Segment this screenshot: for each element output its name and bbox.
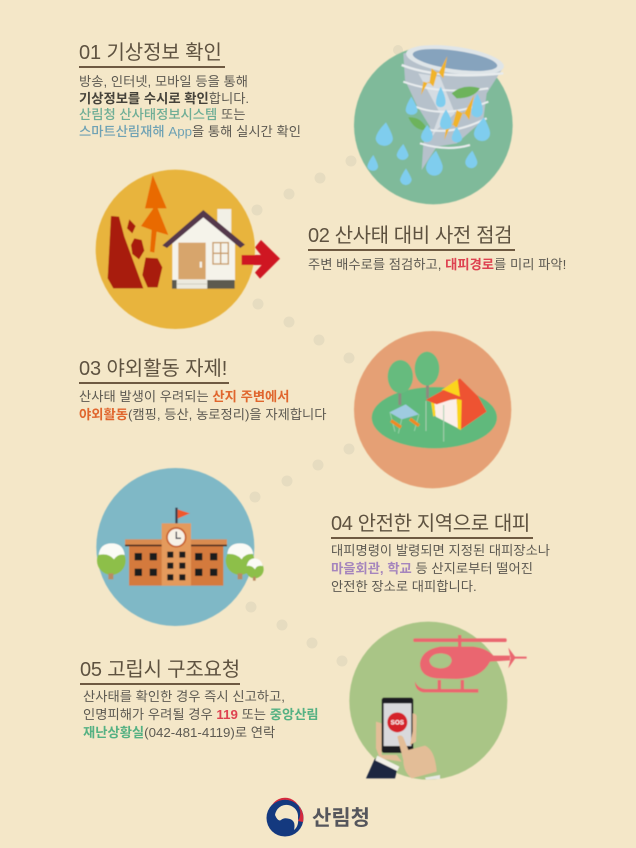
icon: camping scene	[354, 331, 511, 488]
body 01: 스마트산림재해 App을 통해 실시간 확인	[79, 124, 301, 139]
body 04: 마을회관, 학교 등 산지로부터 떨어진	[331, 561, 533, 576]
body 05: 재난상황실(042-481-4119)로 연락	[83, 725, 275, 740]
section 04 text	[331, 513, 550, 594]
body 05	[83, 689, 319, 740]
icon: school building	[96, 468, 264, 626]
section 03 text	[79, 358, 327, 422]
section 05 text	[80, 659, 319, 740]
body 01: 산림청 산사태정보시스템 또는	[79, 107, 245, 122]
section 02 text	[308, 225, 566, 272]
body 04: 안전한 장소로 대피합니다.	[331, 579, 477, 594]
body 01: 기상정보를 수시로 확인합니다.	[79, 91, 249, 106]
body 01: 방송, 인터넷, 모바일 등을 통해	[79, 74, 248, 89]
body 04: 대피명령이 발령되면 지정된 대피장소나	[331, 543, 550, 558]
body 05: 인명피해가 우려될 경우 119 또는 중앙산림	[83, 707, 319, 722]
icon: helicopter and SOS phone	[349, 622, 527, 780]
logo wordmark: 산림청	[312, 807, 370, 830]
icon: tornado with rain and lightning	[354, 40, 513, 204]
heading 01: 01 기상정보 확인	[79, 42, 222, 64]
icon: helicopter and SOS phone: SOS	[391, 720, 404, 727]
body 02: 주변 배수로를 점검하고, 대피경로를 미리 파악!	[308, 257, 566, 272]
heading 05: 05 고립시 구조요청	[80, 659, 240, 681]
icon: landslide and house	[96, 170, 280, 329]
body 01	[79, 74, 301, 139]
body 03: 산사태 발생이 우려되는 산지 주변에서	[79, 389, 290, 404]
path dots	[246, 45, 403, 666]
body 03	[79, 389, 327, 422]
section 01 text	[79, 42, 301, 139]
heading 04: 04 안전한 지역으로 대피	[331, 513, 530, 535]
body 04	[331, 543, 550, 594]
heading 03: 03 야외활동 자제!	[79, 358, 227, 380]
body 05: 산사태를 확인한 경우 즉시 신고하고,	[83, 689, 285, 704]
body 03: 야외활동(캠핑, 등산, 농로정리)을 자제합니다	[79, 407, 327, 422]
heading 02: 02 산사태 대비 사전 점검	[308, 225, 512, 247]
icon: government taegeuk logo	[266, 798, 304, 836]
